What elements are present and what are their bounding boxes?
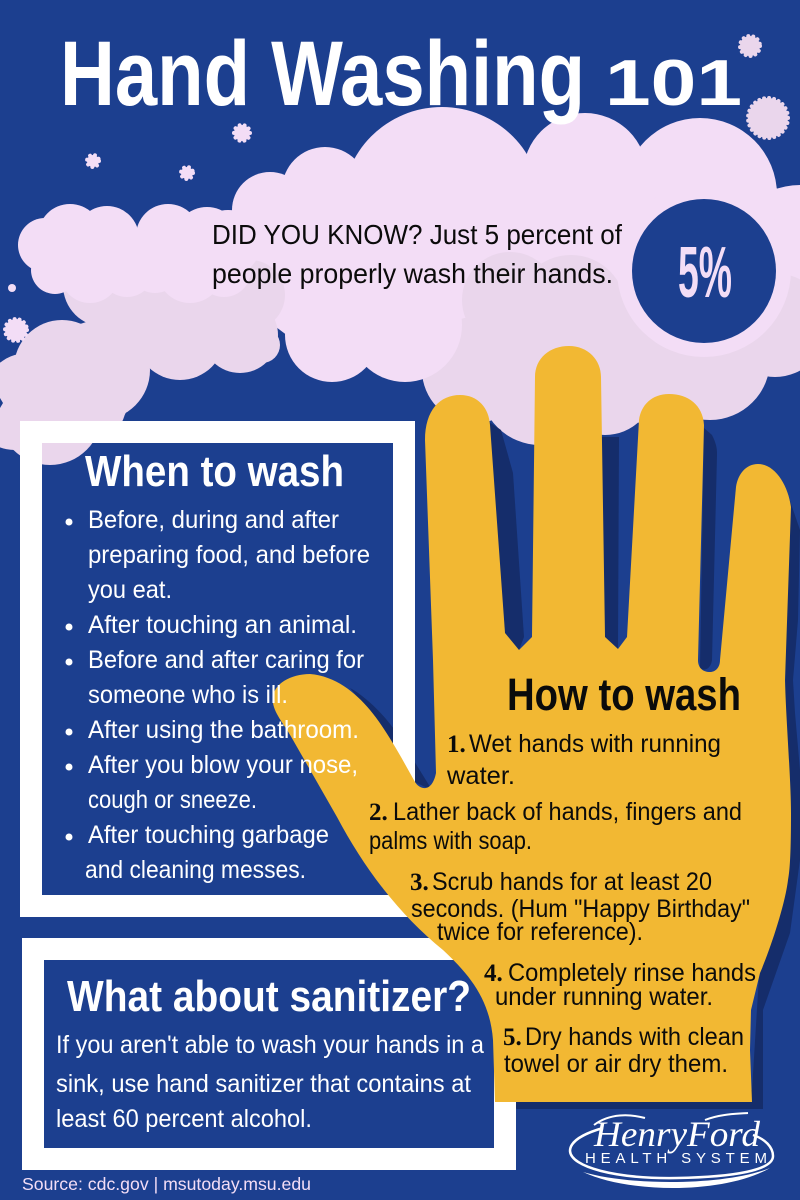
how to wash steps: twice for reference). — [437, 918, 643, 946]
soap foam cloud — [0, 107, 800, 465]
did you know callout: people properly wash their hands. — [212, 258, 613, 289]
soap bubbles — [5, 36, 788, 341]
how to wash steps: 2. — [369, 799, 388, 826]
how to wash steps: seconds. (Hum "Happy Birthday" — [411, 895, 750, 923]
how to wash steps: under running water. — [495, 983, 713, 1011]
how to wash steps: 5. — [503, 1024, 522, 1051]
how to wash steps: Wet hands with running — [469, 730, 721, 758]
when to wash heading: When to wash — [85, 447, 344, 496]
when to wash list: Before and after caring for — [88, 646, 364, 674]
sanitizer body text: least 60 percent alcohol. — [56, 1105, 312, 1133]
panel frame: sanitizer — [22, 938, 516, 1170]
panel frame: when to wash — [20, 421, 415, 917]
sanitizer body text: If you aren't able to wash your hands in a — [56, 1031, 484, 1059]
how to wash steps: 1. — [447, 731, 466, 758]
when to wash list: After touching an animal. — [88, 611, 357, 639]
title: 101 — [605, 46, 742, 119]
how to wash heading: How to wash — [507, 669, 741, 720]
when to wash list: you eat. — [88, 576, 172, 604]
how to wash steps: palms with soap. — [369, 827, 532, 855]
logo: Henry Ford Health System: HEALTH SYSTEM — [585, 1150, 767, 1167]
when to wash list: After touching garbage — [88, 821, 329, 849]
how to wash steps: Completely rinse hands — [508, 959, 756, 987]
when to wash list: cough or sneeze. — [88, 786, 257, 814]
did you know callout — [212, 219, 622, 289]
sanitizer body text — [56, 1031, 484, 1133]
how to wash steps: towel or air dry them. — [504, 1050, 728, 1078]
logo: Henry Ford Health System: HenryFord — [593, 1114, 761, 1154]
how to wash steps: water. — [446, 762, 515, 790]
how to wash steps: Dry hands with clean — [525, 1023, 744, 1051]
sanitizer heading: What about sanitizer? — [67, 972, 471, 1021]
when to wash list: Before, during and after — [88, 506, 339, 534]
when to wash list: After using the bathroom. — [88, 716, 359, 744]
did you know callout: DID YOU KNOW? Just 5 percent of — [212, 219, 622, 250]
source line: Source: cdc.gov | msutoday.msu.edu — [22, 1174, 311, 1194]
5 percent circle: 5% — [678, 233, 732, 313]
when to wash list: After you blow your nose, — [88, 751, 358, 779]
how to wash steps: 4. — [484, 960, 503, 987]
how to wash steps: Scrub hands for at least 20 — [432, 868, 712, 896]
when to wash list: someone who is ill. — [88, 681, 288, 709]
how to wash steps: 3. — [410, 869, 429, 896]
5 percent circle — [632, 199, 776, 343]
when to wash list: preparing food, and before — [88, 541, 370, 569]
when to wash list — [66, 506, 370, 884]
hand shadow — [350, 422, 800, 1109]
how to wash steps: Lather back of hands, fingers and — [393, 798, 742, 826]
when to wash list: and cleaning messes. — [85, 856, 306, 884]
sanitizer body text: sink, use hand sanitizer that contains at — [56, 1070, 471, 1098]
title: Hand Washing — [60, 23, 585, 125]
how to wash steps — [369, 730, 756, 1078]
hand — [273, 346, 791, 1102]
logo: Henry Ford Health System — [570, 1113, 773, 1188]
